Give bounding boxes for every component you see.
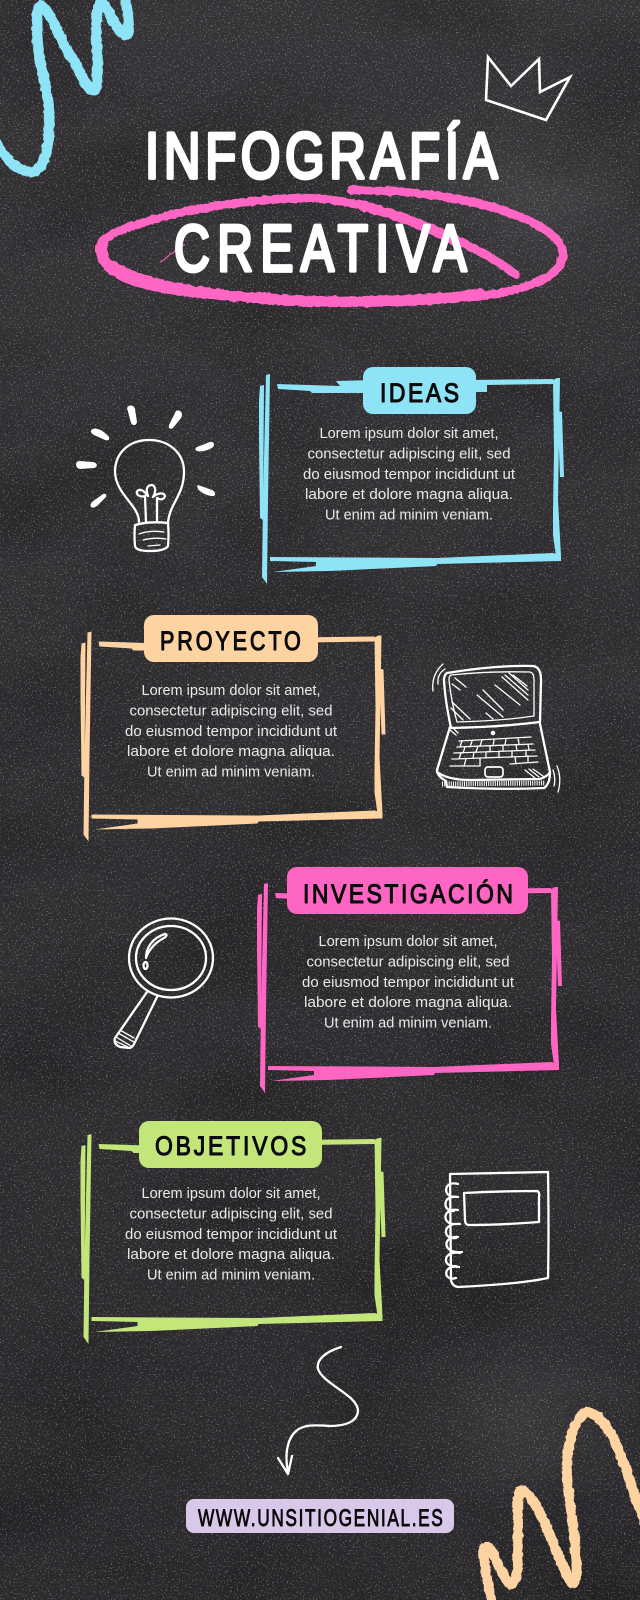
panel: ideas xyxy=(259,367,564,584)
text: ideas: labore et dolore magna aliqua. xyxy=(305,487,513,503)
label: proyecto xyxy=(144,615,318,662)
label: investigacion xyxy=(287,867,528,914)
label: ideas xyxy=(363,367,476,414)
icon: light bulb xyxy=(76,405,215,551)
icon: laptop xyxy=(433,664,560,792)
text: investigacion: Ut enim ad minim veniam. xyxy=(324,1016,492,1032)
panel: proyecto xyxy=(80,615,386,842)
icon: notebook xyxy=(445,1172,548,1287)
frame: investigacion xyxy=(257,883,562,1093)
text: objetivos: labore et dolore magna aliqua. xyxy=(127,1247,335,1263)
frame: ideas xyxy=(259,374,564,584)
title xyxy=(145,120,498,286)
text: investigacion: labore et dolore magna aliqua. xyxy=(304,995,512,1011)
decoration: blue squiggle xyxy=(0,0,129,172)
label: ideas: IDEAS xyxy=(380,378,459,408)
text: proyecto: labore et dolore magna aliqua. xyxy=(127,744,335,760)
text: investigacion: consectetur adipiscing elit, sed xyxy=(306,954,510,970)
title: INFOGRAFÍA xyxy=(145,120,498,192)
title scribble: pink ellipse xyxy=(100,190,563,302)
text: ideas: do eiusmod tempor incididunt ut xyxy=(303,467,515,483)
text: proyecto xyxy=(125,683,337,781)
label: objetivos: OBJETIVOS xyxy=(155,1131,306,1161)
title: CREATIVA xyxy=(174,212,467,286)
icon: magnifying glass xyxy=(115,918,213,1048)
label: proyecto: PROYECTO xyxy=(160,627,301,657)
text: ideas xyxy=(303,426,515,524)
label: objetivos xyxy=(139,1121,322,1168)
text: objetivos: consectetur adipiscing elit, sed xyxy=(130,1206,332,1222)
label: investigacion: INVESTIGACIÓN xyxy=(303,878,513,909)
text: proyecto: Lorem ipsum dolor sit amet, xyxy=(142,683,320,699)
decoration: crown xyxy=(486,57,570,120)
text: investigacion: Lorem ipsum dolor sit amet, xyxy=(318,934,498,950)
text: objetivos: Ut enim ad minim veniam. xyxy=(147,1268,315,1284)
frame: objetivos xyxy=(80,1134,386,1344)
text: ideas: Lorem ipsum dolor sit amet, xyxy=(320,426,498,442)
text: investigacion: do eiusmod tempor incididunt ut xyxy=(302,975,514,991)
panel: investigacion xyxy=(257,867,562,1093)
text: ideas: Ut enim ad minim veniam. xyxy=(325,508,493,524)
website badge: WWW.UNSITIOGENIAL.ES xyxy=(198,1505,443,1532)
arrow xyxy=(278,1347,358,1474)
decoration: peach squiggle xyxy=(484,1412,640,1600)
text: proyecto: consectetur adipiscing elit, sed xyxy=(130,703,332,719)
text: objetivos: do eiusmod tempor incididunt ut xyxy=(125,1227,337,1243)
text: objetivos xyxy=(125,1186,337,1284)
text: ideas: consectetur adipiscing elit, sed xyxy=(308,446,510,462)
frame: proyecto xyxy=(80,632,386,842)
text: proyecto: Ut enim ad minim veniam. xyxy=(147,765,315,781)
text: proyecto: do eiusmod tempor incididunt ut xyxy=(125,724,337,740)
text: investigacion xyxy=(302,934,514,1032)
panel: objetivos xyxy=(80,1121,386,1344)
text: objetivos: Lorem ipsum dolor sit amet, xyxy=(142,1186,320,1202)
